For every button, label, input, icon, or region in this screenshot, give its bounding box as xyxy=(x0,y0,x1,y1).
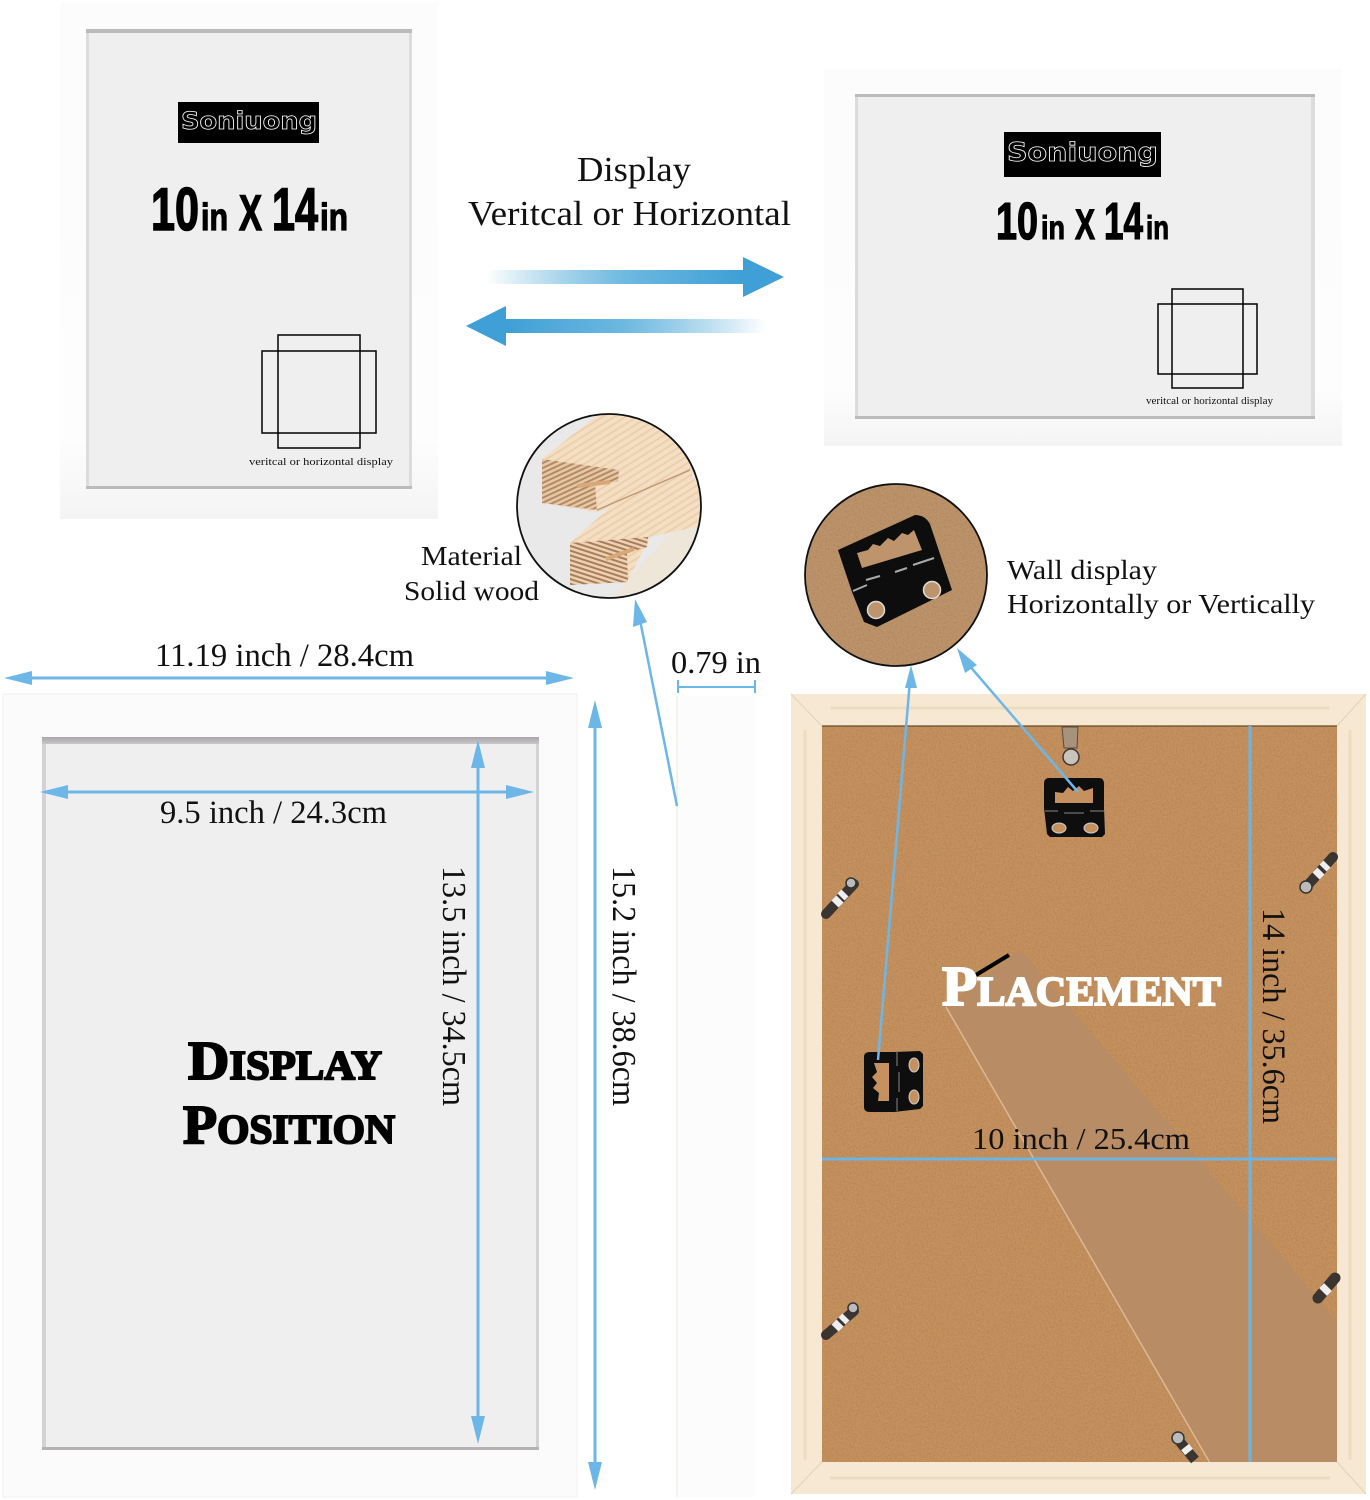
display position label xyxy=(183,1030,395,1155)
caption: veritcal or horizontal display xyxy=(1146,396,1273,407)
clip: right upper xyxy=(1300,857,1333,893)
size label: in xyxy=(201,197,228,239)
dimension: inner width xyxy=(40,785,534,831)
arrow: right xyxy=(486,257,784,297)
icon: hanger close-up xyxy=(805,484,987,666)
size label: in xyxy=(1041,209,1065,246)
dimension: inner height xyxy=(435,740,485,1444)
panel: horizontal white frame xyxy=(824,69,1342,446)
kickstand xyxy=(946,950,1337,1463)
dimension: outer height xyxy=(588,700,642,1490)
display position label: POSITION xyxy=(183,1094,395,1155)
size label xyxy=(996,193,1169,251)
dimension: inner height: 13.5 inch / 34.5cm xyxy=(435,866,472,1106)
clip: top xyxy=(1062,727,1079,765)
hanger: left xyxy=(864,1051,923,1112)
size label: X xyxy=(239,185,262,241)
heading: display orientation: Veritcal or Horizontal xyxy=(468,194,791,233)
brand logo xyxy=(178,102,319,143)
arrow: side profile to wood close-up xyxy=(633,599,677,806)
dimension: frame depth: 0.79 in xyxy=(671,644,761,680)
clip: left upper xyxy=(826,878,856,914)
label: wall display: Wall display xyxy=(1007,555,1158,585)
brand logo xyxy=(1004,132,1161,177)
label: wall display: Horizontally or Vertically xyxy=(1007,589,1316,619)
clip: right lower xyxy=(1318,1278,1335,1298)
size label xyxy=(151,176,348,243)
brand logo: Soniuong xyxy=(1007,138,1158,168)
dimension: outer width: 11.19 inch / 28.4cm xyxy=(155,638,414,674)
icon: solid wood close-up xyxy=(516,413,702,599)
hanger: top xyxy=(1044,778,1105,837)
placement label: PLACEMENT xyxy=(942,956,1221,1018)
dimension: outer width xyxy=(4,638,574,685)
size label: X xyxy=(1075,201,1095,249)
brand logo: Soniuong xyxy=(181,107,317,135)
panel: frame back xyxy=(791,694,1366,1494)
clip: left lower xyxy=(826,1303,858,1335)
heading: display orientation xyxy=(468,150,791,233)
arrow: left xyxy=(466,306,766,346)
size label: 10 xyxy=(996,193,1038,251)
size label: 14 xyxy=(1104,193,1143,251)
size label: 14 xyxy=(272,176,318,243)
label: wall display xyxy=(1007,555,1316,619)
caption: veritcal or horizontal display xyxy=(249,456,394,468)
panel: frame side profile xyxy=(677,696,755,1497)
size label: 10 xyxy=(151,176,199,243)
display position label: DISPLAY xyxy=(188,1030,382,1091)
dimension: inside width: 10 inch / 25.4cm xyxy=(972,1121,1190,1156)
panel: display position frame xyxy=(3,694,577,1497)
dimension: outer height: 15.2 inch / 38.6cm xyxy=(605,866,642,1106)
dimension: inner width: 9.5 inch / 24.3cm xyxy=(160,795,387,831)
label: material: Solid wood xyxy=(404,576,540,606)
heading: display orientation: Display xyxy=(577,150,692,189)
panel: vertical white frame xyxy=(60,2,438,519)
dimension: inside height: 14 inch / 35.6cm xyxy=(1255,908,1291,1124)
clip: bottom xyxy=(1172,1432,1195,1460)
icon: overlapping squares xyxy=(1158,289,1257,388)
label: material xyxy=(404,541,540,606)
arrow: top hanger to close-up xyxy=(957,648,1078,792)
label: material: Material xyxy=(421,541,522,571)
size label: in xyxy=(320,197,348,239)
icon: overlapping squares xyxy=(262,335,376,448)
arrow: left hanger to close-up xyxy=(878,665,917,1060)
size label: in xyxy=(1146,209,1169,246)
